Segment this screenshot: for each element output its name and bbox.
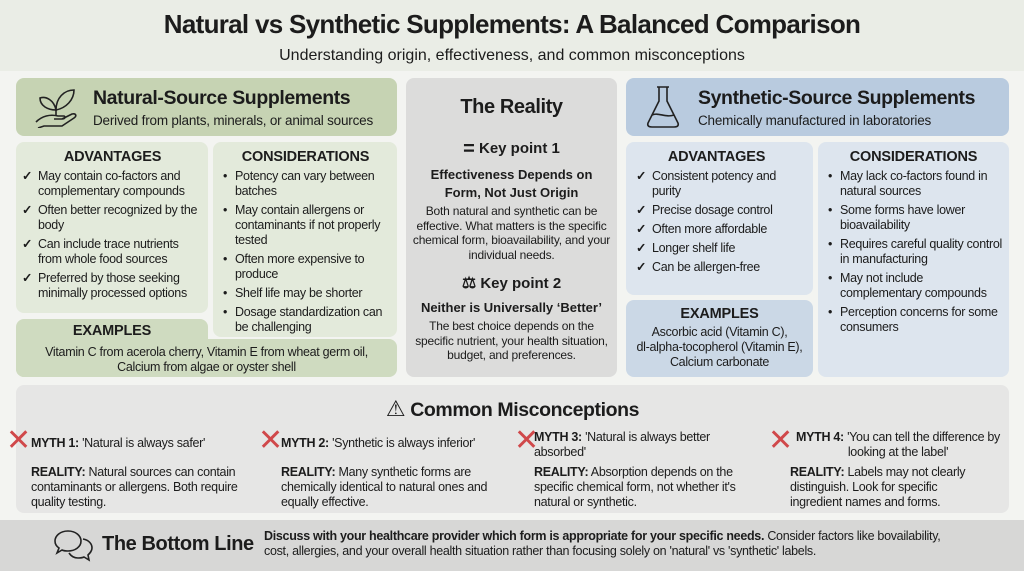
panel: synthetic examples xyxy=(626,300,813,377)
panel: natural advantages: May contain co-factors and complementary compounds xyxy=(38,169,185,198)
panel: natural considerations: Dosage standardization can be challenging xyxy=(235,305,382,334)
panel: common misconceptions xyxy=(16,385,1009,513)
panel: synthetic advantages: Precise dosage control xyxy=(652,203,773,217)
icon: plant in hand xyxy=(36,89,77,128)
panel: synthetic considerations: CONSIDERATIONS xyxy=(850,149,977,165)
myth 4: ✕ xyxy=(768,424,793,457)
panel: natural advantages xyxy=(16,142,208,313)
panel: synthetic advantages: Consistent potency and purity xyxy=(652,169,776,198)
myth 3 xyxy=(514,424,736,509)
panel: natural examples xyxy=(16,319,397,377)
heading: Natural-Source Supplements xyxy=(93,87,350,109)
misconceptions heading: ⚠ Common Misconceptions xyxy=(386,396,639,421)
title: Natural vs Synthetic Supplements: A Balanced Comparison xyxy=(164,9,860,39)
myth 2: REALITY: Many synthetic forms are chemically identical to natural ones and equally effective. xyxy=(281,465,487,509)
myth 4: REALITY: Labels may not clearly distinguish. Look for specific ingredient names and forms. xyxy=(790,465,965,509)
panel: natural considerations: Often more expensive to produce xyxy=(235,252,364,281)
panel: synthetic advantages xyxy=(626,142,813,295)
key point 2: Neither is Universally ‘Better’ xyxy=(421,300,602,315)
key point 2: The best choice depends on the specific nutrient, your health situation, budget, and preferences. xyxy=(415,319,608,362)
myth 2: MYTH 2: 'Synthetic is always inferior' xyxy=(281,436,475,450)
panel: synthetic header xyxy=(626,78,1009,136)
key point 2 xyxy=(415,275,608,362)
myth 3: REALITY: Absorption depends on the specific chemical form, not whether it's natural or synthetic. xyxy=(534,465,736,509)
panel: natural advantages: ADVANTAGES xyxy=(64,149,161,165)
panel: natural advantages: Often better recognized by the body xyxy=(38,203,197,232)
panel: synthetic considerations: Perception concerns for some consumers xyxy=(840,305,998,334)
panel: synthetic examples: Calcium carbonate xyxy=(670,355,769,369)
key point 1 xyxy=(413,138,610,262)
panel: natural considerations xyxy=(213,142,397,337)
subheading: Chemically manufactured in laboratories xyxy=(698,113,931,128)
panel: the reality xyxy=(406,78,617,377)
key point 2: ⚖ Key point 2 xyxy=(462,275,561,292)
panel: natural advantages: Preferred by those seeking minimally processed options xyxy=(38,271,187,300)
panel: natural considerations: May contain allergens or contaminants if not properly tested xyxy=(235,203,380,247)
myth 1: REALITY: Natural sources can contain contaminants or allergens. Both require quality testing. xyxy=(31,465,237,509)
panel: synthetic considerations: May lack co-factors found in natural sources xyxy=(840,169,987,198)
myth 4: MYTH 4: 'You can tell the difference by looking at the label' xyxy=(796,430,1000,459)
myth 2 xyxy=(258,424,487,509)
subheading: Derived from plants, minerals, or animal sources xyxy=(93,113,373,128)
panel: bottom line xyxy=(0,520,1024,571)
panel: synthetic examples: EXAMPLES xyxy=(680,306,759,322)
panel: synthetic considerations xyxy=(818,142,1009,377)
key point 1: = Key point 1 xyxy=(463,138,560,160)
myth 1 xyxy=(6,424,238,509)
heading: Synthetic-Source Supplements xyxy=(698,87,975,109)
key point 1: Form, Not Just Origin xyxy=(445,185,578,200)
myth 1: MYTH 1: 'Natural is always safer' xyxy=(31,436,205,450)
header band xyxy=(0,0,1024,71)
panel: synthetic advantages: ADVANTAGES xyxy=(668,149,765,165)
panel: synthetic examples: dl-alpha-tocopherol (Vitamin E), xyxy=(637,340,802,354)
panel: natural advantages: Can include trace nutrients from whole food sources xyxy=(38,237,179,266)
myth 2: ✕ xyxy=(258,424,283,457)
panel: natural examples: Vitamin C from acerola cherry, Vitamin E from wheat germ oil, xyxy=(45,345,368,359)
panel: synthetic considerations: May not include complementary compounds xyxy=(840,271,987,300)
myth 1: ✕ xyxy=(6,424,31,457)
panel: natural considerations: Potency can vary between batches xyxy=(235,169,374,198)
panel: natural considerations: Shelf life may be shorter xyxy=(235,286,362,300)
myth 3: MYTH 3: 'Natural is always better absorbed' xyxy=(534,430,710,459)
icon: speech bubbles xyxy=(54,530,93,562)
reality heading: The Reality xyxy=(460,96,563,118)
panel: synthetic advantages: Longer shelf life xyxy=(652,241,735,255)
panel: synthetic advantages: Often more affordable xyxy=(652,222,767,236)
bottom line heading: The Bottom Line xyxy=(102,533,254,555)
panel: natural examples: EXAMPLES xyxy=(73,323,151,339)
icon: flask xyxy=(646,86,680,128)
myth 3: ✕ xyxy=(514,424,539,457)
panel: natural header xyxy=(16,78,397,136)
panel: natural examples: Calcium from algae or oyster shell xyxy=(117,360,296,374)
panel: synthetic considerations: Requires careful quality control in manufacturing xyxy=(840,237,1002,266)
panel: synthetic examples: Ascorbic acid (Vitamin C), xyxy=(652,325,787,339)
panel: natural considerations: CONSIDERATIONS xyxy=(242,149,369,165)
bottom line text: Discuss with your healthcare provider which form is appropriate for your specific needs. Consider factors like bovailability, cost, allergies, and your overall health situation rather than focusing solely on 'natural' vs 'synthetic' labels. xyxy=(264,529,940,558)
panel: synthetic advantages: Can be allergen-free xyxy=(652,260,760,274)
myth 4 xyxy=(768,424,1000,509)
key point 1: Both natural and synthetic can be effective. What matters is the specific chemical form, bioavailability, and your individual needs. xyxy=(413,204,610,262)
panel: synthetic considerations: Some forms have lower bioavailability xyxy=(840,203,965,232)
subtitle: Understanding origin, effectiveness, and common misconceptions xyxy=(279,47,745,64)
key point 1: Effectiveness Depends on xyxy=(431,167,592,182)
